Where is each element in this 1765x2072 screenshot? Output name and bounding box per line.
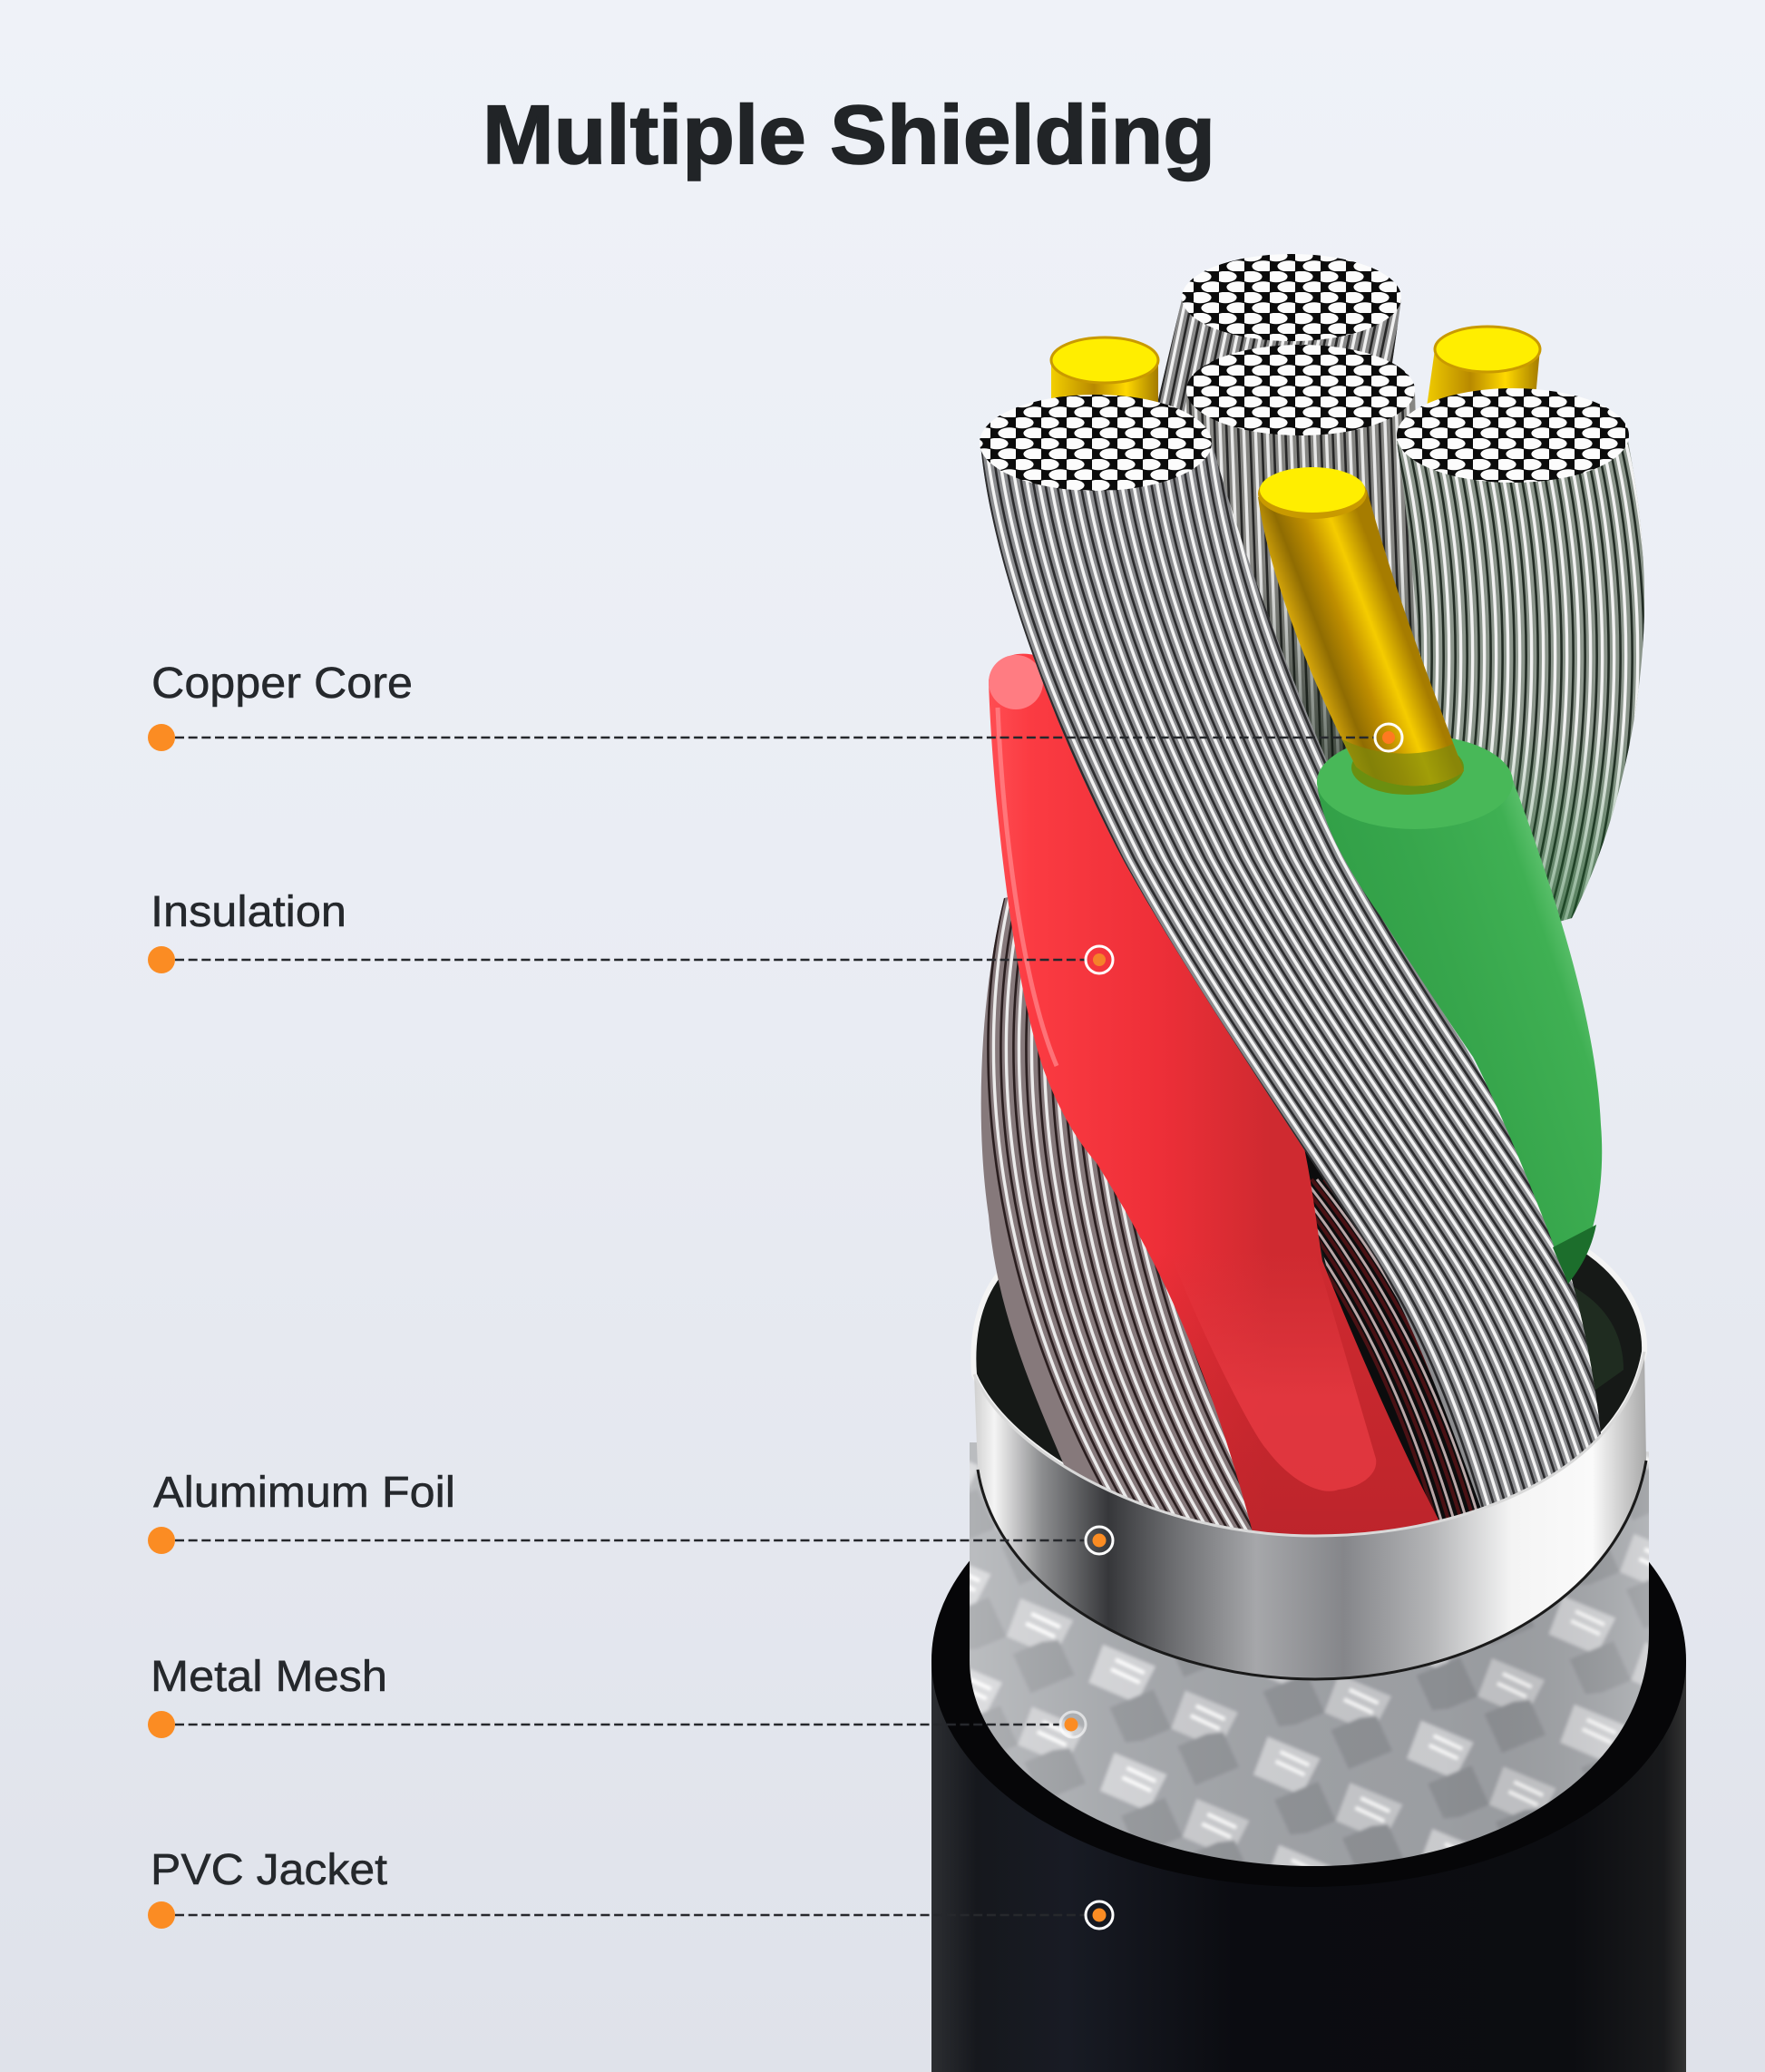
foil opening bbox=[973, 1207, 1644, 1536]
label: Alumimum Foil bbox=[148, 1469, 1113, 1554]
strand bundle: back lower left bbox=[981, 897, 1252, 1530]
label: PVC Jacket bbox=[148, 1846, 1113, 1929]
strand bundle: front left bbox=[980, 395, 1601, 1508]
label: Metal Mesh: Metal Mesh bbox=[151, 1653, 387, 1701]
label: Insulation: Insulation bbox=[151, 888, 346, 936]
PVC jacket bbox=[931, 1433, 1686, 2072]
metal mesh layer bbox=[961, 1433, 1660, 1878]
copper core: front bbox=[1258, 467, 1464, 786]
label: Alumimum Foil: Alumimum Foil bbox=[153, 1469, 455, 1517]
insulation: green wire bbox=[1317, 735, 1602, 1284]
label: Copper Core bbox=[148, 660, 1402, 751]
title: Multiple Shielding bbox=[483, 89, 1215, 181]
label: Copper Core: Copper Core bbox=[151, 660, 413, 708]
strand bundle: back bbox=[1158, 254, 1401, 412]
label: PVC Jacket: PVC Jacket bbox=[151, 1846, 387, 1894]
strand bundle: right bbox=[1397, 388, 1645, 922]
wires and strands bbox=[961, 254, 1746, 1551]
label: Insulation bbox=[148, 888, 1113, 973]
copper core: back right bbox=[1428, 325, 1542, 404]
label: Metal Mesh bbox=[148, 1653, 1086, 1738]
copper core: back left bbox=[1050, 336, 1159, 403]
cable illustration bbox=[931, 254, 1746, 2072]
strand bundle: centre bbox=[1186, 345, 1420, 761]
aluminium foil band bbox=[974, 1352, 1646, 1679]
strands beside red wire bbox=[1304, 1150, 1480, 1520]
insulation: red wire bbox=[989, 654, 1451, 1542]
